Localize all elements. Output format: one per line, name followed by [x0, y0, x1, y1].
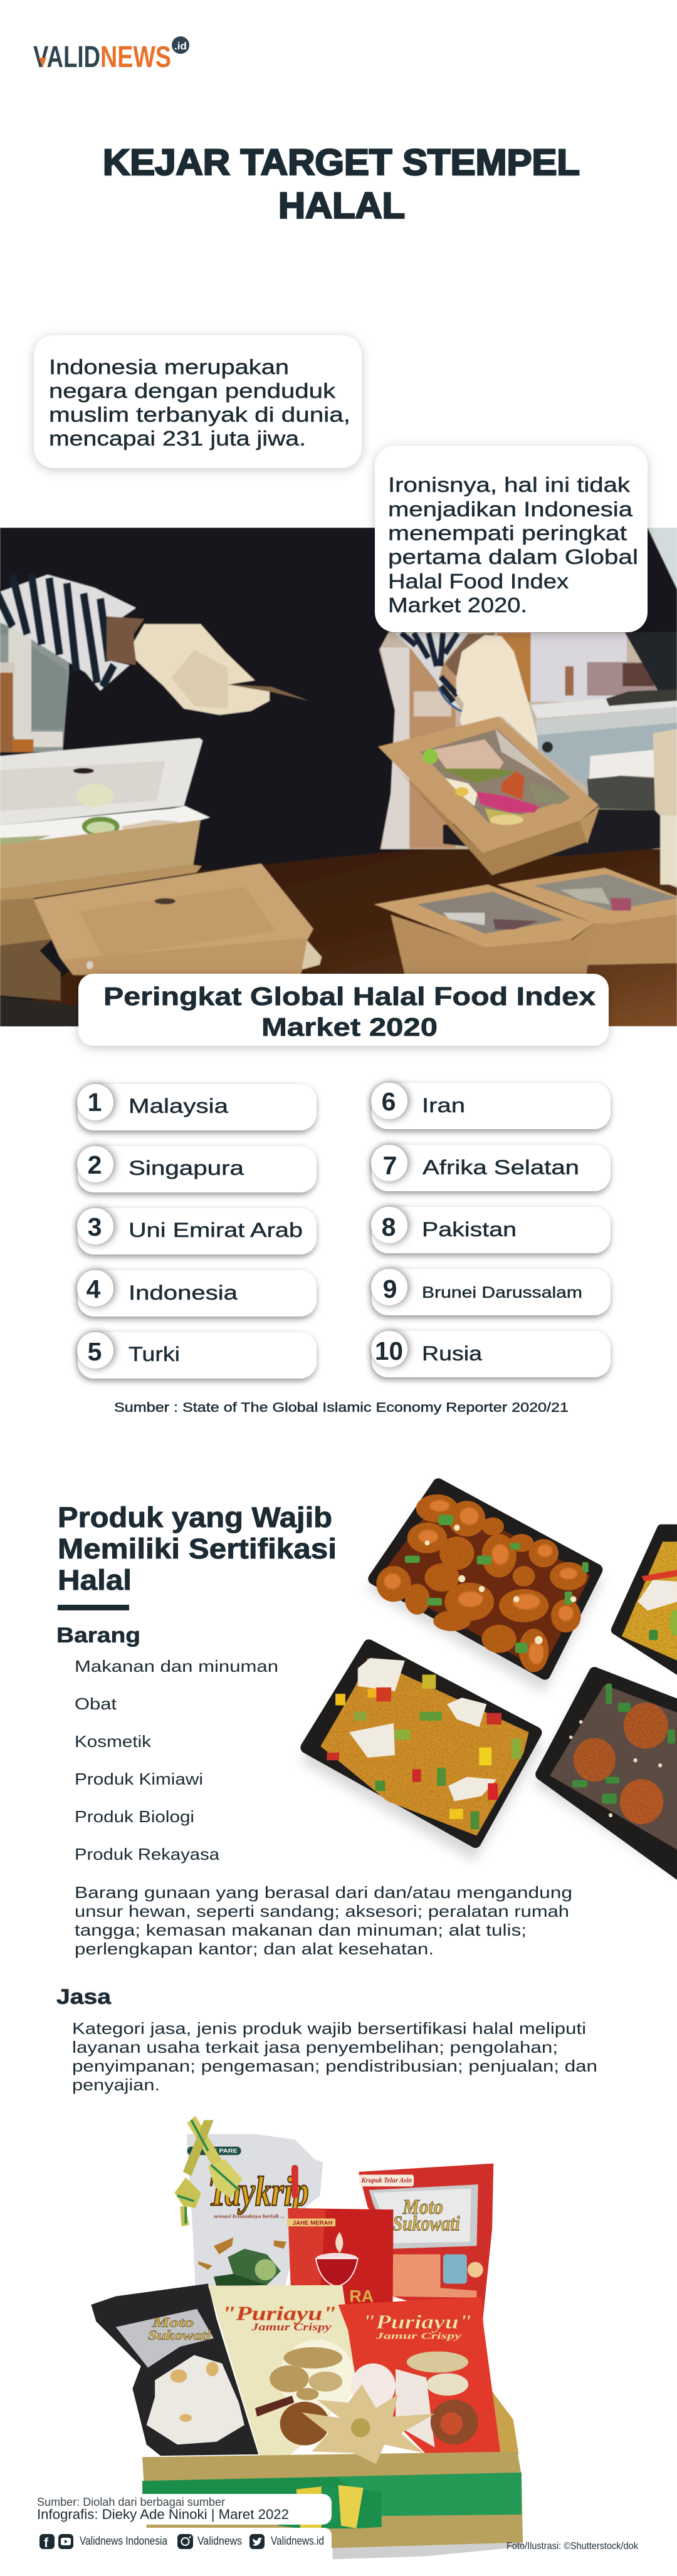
left sleeve: [0, 574, 144, 691]
icon: facebook: [39, 2534, 55, 2550]
grey pare pouch: [187, 2134, 323, 2291]
stacked kraft boxes: [0, 820, 201, 889]
panel: barang: unsur hewan, seperti sandang; aksesori; peralatan rumah: [75, 1902, 569, 1921]
rank 1 Malaysia: Malaysia: [129, 1095, 228, 1117]
panel: barang: Makanan dan minuman: [75, 1657, 278, 1676]
gift box with green ribbon: [142, 2451, 523, 2548]
rank 1 Malaysia: 1: [88, 1088, 102, 1117]
closed kraft box: [33, 863, 313, 975]
rank 1 Malaysia: [77, 1084, 317, 1130]
section heading: products: Memiliki Sertifikasi: [58, 1533, 337, 1565]
logo: Validnews.id: .id: [174, 40, 187, 52]
rank 6 Iran: [371, 1083, 611, 1129]
rank 2 Singapura: Singapura: [129, 1157, 244, 1179]
credit card: [0, 2494, 332, 2525]
rank 3 Uni Emirat Arab: Uni Emirat Arab: [129, 1219, 303, 1241]
rice tray: [306, 1645, 536, 1842]
icon: youtube: [58, 2534, 73, 2549]
callout: Indonesia not first: pertama dalam Global: [388, 545, 638, 568]
credit card: Sumber: Diolah dari berbagai sumber: [37, 2496, 225, 2508]
cream mushroom pouch: "Puriayu": [221, 2302, 337, 2325]
photo: food trays: [301, 1484, 677, 1885]
satin lining: [488, 2386, 518, 2454]
panel: barang: Produk Kimiawi: [75, 1770, 203, 1788]
held box: [378, 716, 600, 875]
social media card: Validnews: [197, 2535, 242, 2547]
gravy tray: [541, 1673, 677, 1885]
icon: instagram: [177, 2534, 193, 2549]
callout: Indonesia not first: menempati peringkat: [388, 521, 627, 545]
title: KEJAR TARGET STEMPEL: [103, 142, 580, 183]
gold flower: [302, 2384, 435, 2464]
black cracker pouch: Sukowati: [148, 2327, 211, 2343]
rank 7 Afrika Selatan: Afrika Selatan: [422, 1156, 579, 1179]
rank 8 Pakistan: Pakistan: [422, 1218, 517, 1241]
panel: barang: Barang: [56, 1624, 140, 1647]
title: [103, 142, 580, 226]
table: [0, 847, 677, 1026]
noodle tray: [616, 1529, 677, 1681]
rank 9 Brunei Darussalam: Brunei Darussalam: [422, 1284, 582, 1301]
social media card: Validnews Indonesia: [80, 2535, 168, 2547]
rank 4 Indonesia: [77, 1270, 317, 1317]
photo: halal snack hamper: [91, 2116, 524, 2559]
panel: barang: perlengkapan kantor; dan alat kesehatan.: [75, 1939, 434, 1958]
callout: Indonesia not first: [375, 446, 648, 632]
panel: barang: [56, 1624, 572, 1958]
cream mushroom pouch: Jamur Crispy: [251, 2321, 332, 2333]
title: HALAL: [278, 185, 405, 226]
box on table, right: [497, 868, 677, 965]
egg cracker pouch: Krupuk Telur Asin: [361, 2177, 412, 2184]
panel: jasa: Jasa: [56, 1985, 112, 2009]
rank 5 Turki: Turki: [129, 1343, 180, 1365]
grey pare pouch: sensasi kriuuuknya berisik ...: [213, 2214, 285, 2219]
right sleeve: [395, 633, 495, 711]
rank 5 Turki: [77, 1332, 317, 1379]
panel: barang: tangga; kemasan makanan dan minuman; alat tulis;: [75, 1921, 527, 1939]
callout: Indonesia not first: Ironisnya, hal ini tidak: [388, 473, 631, 496]
section heading: products: [58, 1501, 337, 1610]
chicken tray: [374, 1484, 597, 1674]
rank 10 Rusia: [371, 1331, 611, 1377]
rank 7 Afrika Selatan: 7: [383, 1151, 397, 1180]
cream mushroom pouch: [208, 2285, 357, 2456]
rank 4 Indonesia: 4: [87, 1275, 101, 1303]
panel: jasa: [56, 1985, 597, 2094]
callout: muslim population: negara dengan penduduk: [49, 379, 336, 402]
logo: Validnews.id: VALID: [33, 41, 100, 74]
hero photo: gloved hands packing kraft food boxes: [0, 528, 677, 1028]
photo credit: Foto/Ilustrasi: ©Shutterstock/dok: [506, 2541, 639, 2552]
panel: barang: Barang gunaan yang berasal dari dan/atau mengandung: [75, 1883, 572, 1902]
callout: muslim population: [34, 335, 362, 468]
callout: muslim population: mencapai 231 juta jiwa.: [49, 427, 306, 450]
rank 6 Iran: Iran: [422, 1094, 465, 1117]
ranking heading: [78, 974, 609, 1046]
panel: barang: Kosmetik: [75, 1732, 152, 1751]
section heading: products: Produk yang Wajib: [58, 1501, 332, 1533]
logo: Validnews.id: [33, 36, 189, 74]
red ginger pouch: RA: [349, 2287, 374, 2306]
panel: jasa: Kategori jasa, jenis produk wajib bersertifikasi halal meliputi: [72, 2019, 586, 2038]
rank 2 Singapura: [77, 1146, 317, 1192]
icon: facebook: f: [44, 2536, 49, 2550]
kitchen background and right arm: [379, 632, 677, 888]
rank 3 Uni Emirat Arab: [77, 1208, 317, 1254]
red mushroom pouch: [338, 2297, 500, 2454]
panel: barang: Produk Rekayasa: [75, 1845, 220, 1864]
egg cracker pouch: Moto: [402, 2196, 443, 2219]
lid of open box: [0, 738, 210, 847]
ranking source: Sumber : State of The Global Islamic Economy Reporter 2020/21: [114, 1400, 569, 1415]
grey pare pouch: K PARE: [213, 2148, 238, 2154]
box on table, left: [374, 885, 594, 978]
rank 10 Rusia: Rusia: [422, 1342, 482, 1365]
rank 9 Brunei Darussalam: [371, 1269, 611, 1315]
right glove: [456, 635, 538, 750]
callout: Indonesia not first: Halal Food Index: [388, 570, 569, 593]
ribbon bow: [278, 2485, 382, 2528]
rank 6 Iran: 6: [382, 1087, 396, 1116]
social media card: [0, 2528, 332, 2554]
logo: Validnews.id: NEWS: [100, 41, 171, 74]
panel: jasa: layanan usaha terkait jasa penyembelihan; pengolahan;: [72, 2038, 558, 2057]
callout: muslim population: muslim terbanyak di dunia,: [49, 403, 350, 426]
callout: Indonesia not first: Market 2020.: [388, 593, 527, 617]
red mushroom pouch: "Puriayu": [362, 2310, 473, 2333]
right kraft boxes: [374, 716, 677, 978]
panel: jasa: penyimpanan; pengemasan; pendistribusian; penjualan; dan: [72, 2057, 597, 2075]
rank 2 Singapura: 2: [88, 1150, 102, 1179]
panel: barang: Produk Biologi: [75, 1807, 194, 1826]
left glove: [134, 624, 270, 715]
social media card: Validnews.id: [271, 2535, 324, 2547]
rank 10 Rusia: 10: [375, 1337, 403, 1365]
callout: muslim population: Indonesia merupakan: [49, 355, 289, 378]
black cracker pouch: Moto: [151, 2315, 194, 2330]
icon: twitter: [249, 2534, 265, 2549]
red ginger pouch: [287, 2208, 393, 2306]
ranking heading: Peringkat Global Halal Food Index: [103, 982, 596, 1011]
red mushroom pouch: Jamur Crispy: [375, 2330, 461, 2341]
red ginger pouch: JAHE MERAH: [293, 2219, 333, 2226]
rank 4 Indonesia: Indonesia: [129, 1281, 238, 1304]
rank 3 Uni Emirat Arab: 3: [88, 1212, 102, 1241]
grey pare pouch: Taykrip: [208, 2169, 309, 2215]
rank 8 Pakistan: 8: [382, 1212, 396, 1241]
egg cracker pouch: Sukowati: [393, 2213, 460, 2236]
ketupat ribbon: [174, 2116, 242, 2226]
rank 7 Afrika Selatan: [371, 1145, 611, 1191]
rank 5 Turki: 5: [88, 1337, 102, 1366]
rank 9 Brunei Darussalam: 9: [383, 1275, 397, 1303]
egg cracker pouch: [359, 2164, 493, 2324]
left background, sleeve and glove: [0, 574, 322, 1028]
panel: barang: Obat: [75, 1694, 117, 1713]
rank 8 Pakistan: [371, 1207, 611, 1253]
ranking heading: Market 2020: [261, 1013, 438, 1041]
credit card: Infografis: Dieky Ade Ninoki | Maret 2022: [37, 2506, 289, 2522]
black cracker pouch: [91, 2284, 258, 2456]
section heading: products: Halal: [58, 1564, 132, 1596]
panel: jasa: penyajian.: [72, 2075, 160, 2094]
callout: Indonesia not first: menjadikan Indonesia: [388, 498, 633, 521]
